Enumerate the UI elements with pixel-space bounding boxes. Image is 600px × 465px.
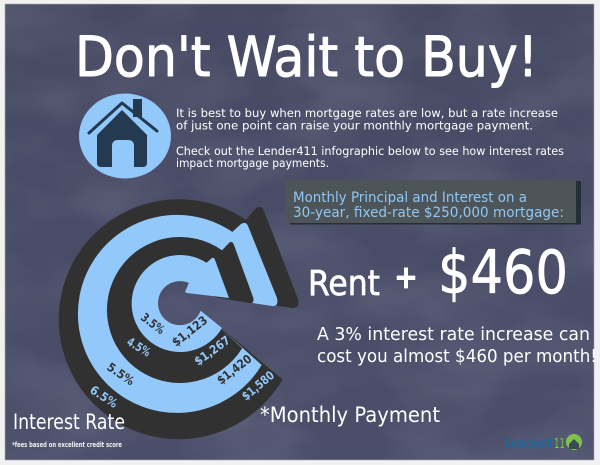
rate labels: 3.5% bbox=[138, 310, 167, 337]
rate labels bbox=[87, 310, 167, 411]
rate labels: 5.5% bbox=[104, 360, 137, 388]
payment labels: $1,420 bbox=[214, 352, 254, 387]
footnote: *fees based on excellent credit score bbox=[12, 441, 122, 449]
intro text: Check out the Lender411 infographic below to see how interest rates bbox=[176, 144, 564, 158]
ring: 6.5% bbox=[59, 199, 298, 439]
title: Don't Wait to Buy! bbox=[75, 25, 538, 89]
rate increase text bbox=[317, 325, 597, 367]
payment labels: $1,267 bbox=[192, 333, 233, 368]
headline: rent plus 460: $460 bbox=[438, 238, 568, 308]
intro text: It is best to buy when mortgage rates are low, but a rate increase bbox=[176, 106, 558, 120]
payment labels: $1,123 bbox=[169, 313, 210, 349]
logo: Lender411: Lender4 bbox=[505, 437, 553, 452]
axis label: monthly payment: *Monthly Payment bbox=[260, 403, 440, 427]
callout: mortgage terms: Monthly Principal and Interest on a bbox=[293, 190, 527, 206]
logo: Lender411 bbox=[505, 434, 582, 452]
spiral chart: interest rate vs monthly payment bbox=[59, 199, 298, 439]
headline: rent plus 460 bbox=[308, 238, 568, 308]
callout: mortgage terms: 30-year, fixed-rate $250,000 mortgage: bbox=[293, 205, 564, 221]
payment labels: $1,580 bbox=[239, 368, 277, 403]
icon: house in circle bbox=[79, 94, 171, 178]
ring: 3.5% bbox=[132, 255, 229, 352]
rate increase text: A 3% interest rate increase can bbox=[317, 325, 590, 345]
callout: mortgage terms bbox=[285, 180, 581, 224]
intro text bbox=[176, 106, 564, 170]
rate labels: 6.5% bbox=[87, 383, 120, 411]
ring: 5.5% bbox=[78, 215, 277, 413]
headline: rent plus 460: + bbox=[394, 258, 418, 296]
rate labels: 4.5% bbox=[124, 335, 153, 359]
intro text: impact mortgage payments. bbox=[176, 156, 329, 170]
logo: Lender411: 11 bbox=[554, 437, 565, 452]
headline: rent plus 460: Rent bbox=[308, 264, 380, 304]
axis label: interest rate: Interest Rate bbox=[13, 410, 125, 434]
intro text: of just one point can raise your monthly mortgage payment. bbox=[176, 118, 533, 132]
ring: 4.5% bbox=[107, 237, 254, 383]
payment labels bbox=[169, 313, 277, 403]
